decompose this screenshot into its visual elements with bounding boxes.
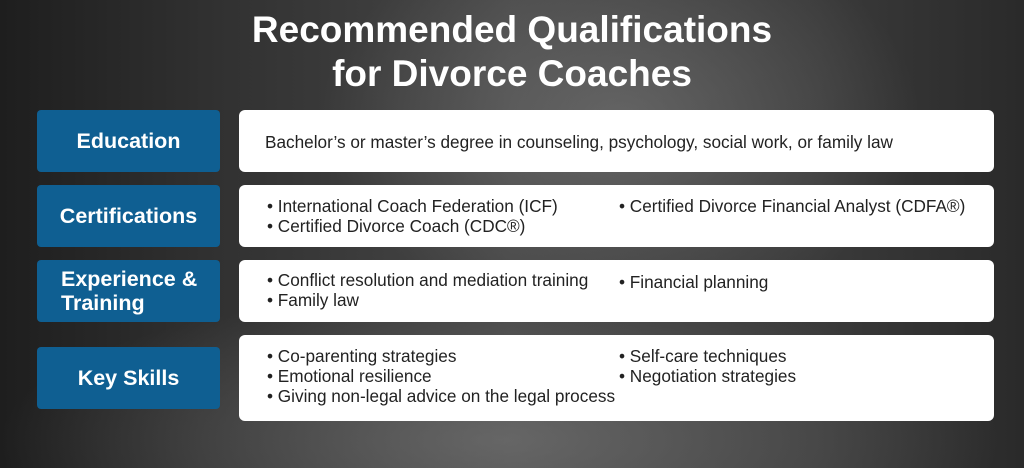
title: [252, 9, 772, 94]
panel: certifications: • Certified Divorce Coach (CDC®): [267, 216, 525, 236]
panel: certifications: • International Coach Federation (ICF): [267, 196, 558, 216]
panel: key skills: • Self-care techniques: [619, 346, 786, 366]
panel: key skills: • Emotional resilience: [267, 366, 432, 386]
panel: key skills: [239, 335, 994, 421]
label: certifications: [37, 185, 220, 247]
title: Recommended Qualifications: [252, 9, 772, 50]
panel: education: Bachelor’s or master’s degree in counseling, psychology, social work, or family law: [265, 132, 893, 152]
label: education: [37, 110, 220, 172]
label: key skills: [37, 347, 220, 409]
panel: key skills: • Giving non-legal advice on the legal process: [267, 386, 615, 406]
label: experience: Experience &: [61, 267, 197, 291]
panel: experience: • Family law: [267, 290, 359, 310]
label: certifications: Certifications: [60, 204, 197, 228]
panel: experience: • Financial planning: [619, 272, 768, 292]
panel: experience: [239, 260, 994, 322]
panel: certifications: • Certified Divorce Financial Analyst (CDFA®): [619, 196, 965, 216]
panel: education: [239, 110, 994, 172]
panel: key skills: • Co-parenting strategies: [267, 346, 456, 366]
label: experience: Training: [61, 291, 145, 315]
label: education: Education: [77, 129, 180, 153]
panel: key skills: • Negotiation strategies: [619, 366, 796, 386]
label: key skills: Key Skills: [78, 366, 179, 390]
panel: certifications: [239, 185, 994, 247]
label: experience: [37, 260, 220, 322]
panel: experience: • Conflict resolution and mediation training: [267, 270, 588, 290]
title: for Divorce Coaches: [332, 53, 692, 94]
